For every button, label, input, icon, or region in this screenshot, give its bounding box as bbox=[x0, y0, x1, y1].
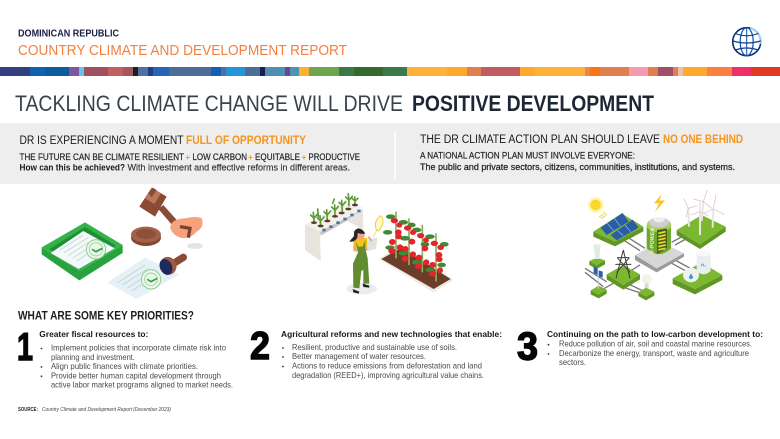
hydrogen platform bbox=[673, 275, 722, 294]
illustration: clean energy network: E-POWER bbox=[649, 228, 656, 253]
panel: grey message band bbox=[0, 123, 780, 184]
text block: moment of opportunity: PRODUCTIVE bbox=[308, 152, 360, 163]
text block: moment of opportunity: DR IS EXPERIENCING A MOMENT bbox=[20, 133, 184, 147]
text block: moment of opportunity: With investment and effective reforms in different areas. bbox=[128, 163, 350, 173]
text block: moment of opportunity: LOW CARBON bbox=[192, 152, 247, 163]
heading: key priorities: WHAT ARE SOME KEY PRIORITIES? bbox=[18, 309, 194, 323]
text block: moment of opportunity: FULL OF OPPORTUNITY bbox=[186, 133, 307, 147]
illustration: farmer with tomatoes bbox=[305, 194, 453, 294]
priority 2: Agricultural reforms and new technologies that enable: bbox=[281, 329, 502, 339]
battery bbox=[647, 225, 671, 254]
text block: no one behind: The public and private sectors, citizens, communities, institutions, and systems. bbox=[420, 162, 735, 172]
priority 2: Actions to reduce emissions from deforestation and land bbox=[292, 361, 482, 371]
illustration: fiscal documents, gavel and stamp bbox=[42, 188, 203, 299]
priority 3: sectors. bbox=[559, 357, 586, 367]
priority 3: Continuing on the path to low-carbon development to: bbox=[547, 329, 763, 339]
text block: moment of opportunity: EQUITABLE bbox=[255, 152, 300, 163]
title: TACKLING CLIMATE CHANGE WILL DRIVE bbox=[15, 91, 403, 116]
source note: SOURCE: bbox=[18, 407, 38, 413]
wind platform bbox=[677, 227, 726, 249]
priority 3: Reduce pollution of air, soil and coastal marine resources. bbox=[559, 339, 752, 349]
sun bbox=[588, 197, 603, 213]
number 2: 2 bbox=[250, 325, 270, 368]
shelf seedlings bbox=[311, 194, 358, 226]
text block: moment of opportunity bbox=[20, 133, 360, 173]
priority 2: degradation (REED+), improving agricultural value chains. bbox=[292, 370, 484, 380]
text block: no one behind bbox=[420, 132, 743, 172]
text block: moment of opportunity: How can this be achieved? bbox=[20, 163, 125, 173]
priority 1: planning and investment. bbox=[51, 352, 135, 362]
lightning bolt bbox=[654, 194, 665, 212]
header: report name: COUNTRY CLIMATE AND DEVELOPMENT REPORT bbox=[18, 42, 347, 59]
priority 1: active labor market programs aligned to market needs. bbox=[51, 380, 233, 390]
text block: moment of opportunity: + bbox=[185, 153, 190, 162]
solar platform bbox=[593, 227, 643, 246]
illustration: clean energy network: H₂ bbox=[701, 263, 706, 268]
header: report name bbox=[18, 29, 347, 59]
header: report name: DOMINICAN REPUBLIC bbox=[18, 29, 119, 40]
soil bed bbox=[379, 245, 453, 292]
connector cables bbox=[585, 235, 693, 293]
icon: World Bank globe logo bbox=[733, 28, 761, 56]
central hub bbox=[635, 253, 684, 272]
title: POSITIVE DEVELOPMENT bbox=[412, 91, 654, 116]
number 3: 3 bbox=[517, 326, 538, 368]
text block: no one behind: THE DR CLIMATE ACTION PLAN SHOULD LEAVE bbox=[420, 132, 660, 146]
priority 1: Greater fiscal resources to: bbox=[39, 329, 148, 339]
priority 2: Better management of water resources. bbox=[292, 351, 426, 361]
text block: moment of opportunity: THE FUTURE CAN BE CLIMATE RESILIENT bbox=[20, 152, 184, 163]
text block: no one behind: A NATIONAL ACTION PLAN MUST INVOLVE EVERYONE: bbox=[420, 150, 635, 161]
farmer bbox=[346, 283, 377, 294]
number 1: 1 bbox=[17, 326, 33, 369]
title bbox=[15, 91, 654, 116]
priority 1: Align public finances with climate priorities. bbox=[51, 361, 198, 371]
text block: no one behind: NO ONE BEHIND bbox=[663, 132, 743, 146]
priority 1: Provide better human capital development through bbox=[51, 370, 221, 380]
priority 2 bbox=[250, 325, 502, 380]
priority 1: Implement policies that incorporate climate risk into bbox=[51, 343, 226, 353]
priority 3 bbox=[517, 326, 763, 368]
pylon platform bbox=[607, 274, 640, 290]
priority 1 bbox=[17, 326, 233, 390]
priority 3: Decarbonize the energy, transport, waste and agriculture bbox=[559, 348, 749, 358]
text block: moment of opportunity: + bbox=[248, 153, 253, 162]
colour band bbox=[0, 67, 780, 76]
illustration: clean energy network bbox=[585, 190, 726, 300]
priority 2: Resilient, productive and sustainable use of soils. bbox=[292, 342, 457, 352]
small nodes bbox=[589, 260, 605, 269]
tomato plants bbox=[396, 212, 436, 282]
text block: moment of opportunity: + bbox=[302, 153, 307, 162]
source note: Country Climate and Development Report (December 2023) bbox=[42, 407, 171, 413]
